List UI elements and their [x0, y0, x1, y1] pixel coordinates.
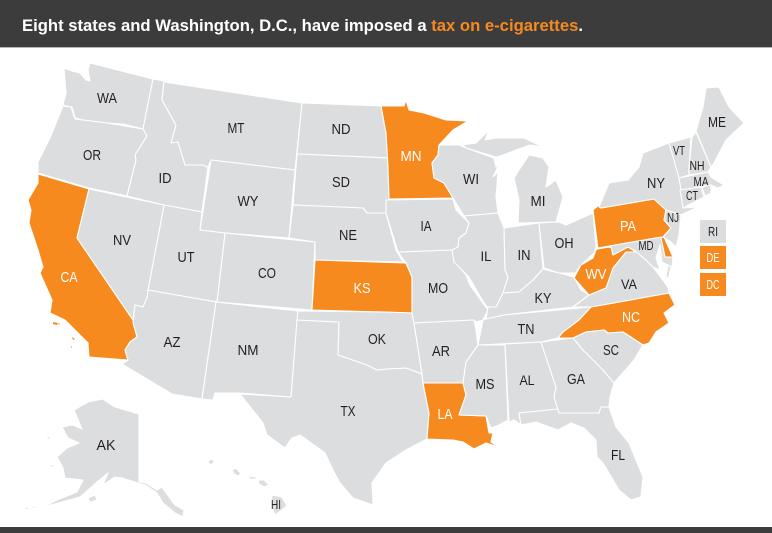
state: Michigan [463, 130, 563, 223]
state: Minnesota [381, 100, 468, 199]
state: New York: NY [647, 175, 665, 192]
state: North Carolina [558, 293, 675, 345]
state: Missouri [398, 250, 488, 323]
state: North Dakota: ND [332, 121, 351, 138]
header bar [0, 0, 772, 48]
state: Tennessee: TN [518, 321, 534, 338]
state: Montana: MT [228, 120, 244, 137]
state: Texas [240, 320, 429, 505]
state: Utah [148, 205, 225, 302]
state: Rhode Island [702, 185, 711, 196]
state: Colorado: CO [258, 265, 276, 282]
state: Wisconsin: WI [463, 171, 479, 188]
state: South Dakota [293, 154, 389, 213]
state: Alabama: AL [520, 372, 535, 388]
title: Eight states and Washington, D.C., have imposed a tax on e-cigarettes. [22, 16, 583, 35]
state: Oklahoma: OK [368, 331, 386, 348]
state: Alabama [505, 342, 558, 425]
state: Maryland [598, 237, 673, 270]
state: Nevada [77, 189, 164, 320]
state: Massachusetts: MA [694, 175, 709, 189]
state: Maine: ME [708, 114, 726, 131]
state: Maryland: MD [638, 239, 654, 253]
state: Colorado [217, 233, 315, 310]
state: Washington: WA [97, 90, 117, 107]
state: Arizona: AZ [164, 334, 180, 351]
map of US states [23, 63, 744, 517]
state: Alaska: AK [96, 437, 116, 454]
state: Mississippi: MS [476, 376, 494, 393]
state: Missouri: MO [428, 280, 448, 297]
state: Kansas [312, 260, 412, 313]
state: New Mexico [202, 302, 298, 400]
state: Oregon [38, 106, 147, 196]
state: Indiana [503, 223, 543, 293]
state: New York [599, 143, 698, 215]
state: Virginia: VA [621, 276, 638, 292]
legend box: Rhode Island: RI [708, 225, 718, 239]
state: South Dakota: SD [332, 174, 350, 191]
state: Wyoming [200, 160, 295, 238]
state: New Hampshire: NH [690, 159, 704, 173]
legend box: Delaware: DE [706, 251, 720, 265]
state: Ohio: OH [554, 235, 574, 252]
state: Texas: TX [340, 403, 356, 420]
state: Kentucky [486, 269, 589, 319]
state: Florida: FL [611, 447, 625, 464]
state: Arizona [122, 290, 216, 399]
state: Vermont [669, 137, 691, 178]
state: Minnesota: MN [400, 148, 422, 165]
state: Arkansas [414, 320, 478, 383]
state: Mississippi [459, 345, 508, 428]
state: Vermont: VT [673, 144, 685, 158]
state: Oregon: OR [83, 147, 101, 164]
state: Massachusetts [679, 172, 724, 190]
state: New Hampshire [689, 132, 711, 175]
state: South Carolina: SC [603, 342, 619, 359]
state: Idaho [127, 79, 208, 212]
state: Pennsylvania: PA [620, 218, 636, 235]
state: North Dakota [297, 103, 388, 158]
state: Connecticut [680, 187, 704, 208]
state: Nebraska [289, 205, 403, 262]
state: Tennessee [478, 307, 591, 345]
icon: California islands [53, 322, 75, 348]
state: Iowa [386, 199, 469, 252]
state: Montana [162, 82, 302, 170]
state: Louisiana [423, 383, 499, 449]
state: Illinois [452, 213, 508, 308]
state: Virginia [573, 250, 672, 307]
state: South Carolina [573, 330, 643, 383]
state: Delaware [661, 237, 673, 257]
state: California [28, 174, 137, 360]
state: New Jersey [663, 210, 681, 247]
legend box: Washington DC: DC [706, 278, 720, 292]
state: Wisconsin [432, 145, 501, 216]
state: Hawaii [208, 459, 287, 515]
state: California: CA [60, 269, 78, 286]
state: Michigan: MI [530, 193, 546, 210]
state: Kentucky: KY [534, 290, 552, 307]
state: Idaho: ID [158, 170, 172, 187]
state: Ohio [539, 213, 596, 273]
state: North Carolina: NC [622, 309, 640, 326]
state: Washington [63, 63, 153, 129]
state: Georgia [541, 338, 614, 413]
state: West Virginia: WV [586, 266, 606, 283]
state: Florida [519, 407, 643, 500]
state: New Mexico: NM [238, 342, 258, 359]
state: Oklahoma [297, 311, 422, 374]
state: Indiana: IN [518, 247, 530, 264]
state: New Jersey: NJ [667, 211, 679, 225]
state: Hawaii: HI [271, 498, 281, 512]
state: Alaska [23, 399, 184, 517]
state: West Virginia [574, 247, 636, 295]
state: Nevada: NV [113, 232, 131, 249]
state: Iowa: IA [420, 218, 432, 235]
footer bar [0, 527, 772, 533]
state: Illinois: IL [480, 248, 492, 264]
state: Georgia: GA [567, 371, 585, 388]
state: Louisiana: LA [438, 406, 452, 423]
state: Maine [696, 87, 744, 167]
state: Arkansas: AR [432, 343, 450, 360]
legend: small eastern jurisdictions [700, 220, 726, 296]
state: Connecticut: CT [686, 189, 698, 203]
state: Wyoming: WY [238, 193, 258, 210]
state: Kansas: KS [354, 280, 370, 297]
state: Pennsylvania [593, 199, 671, 249]
state: Nebraska: NE [339, 227, 357, 244]
state: Utah: UT [178, 249, 194, 266]
